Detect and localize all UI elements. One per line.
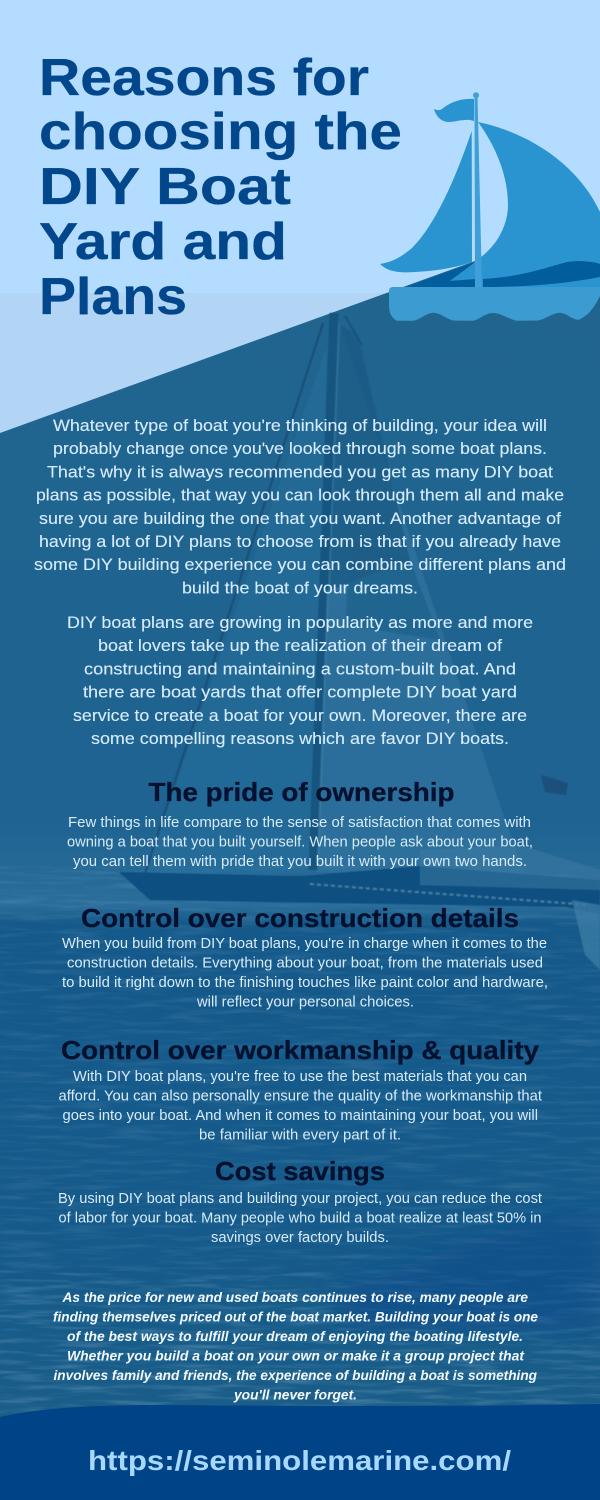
title: Plans <box>39 268 187 326</box>
intro paragraph: Whatever type of boat you're thinking of building, your idea will <box>53 417 547 435</box>
footer band <box>0 1404 600 1500</box>
body text: By using DIY boat plans and building your project, you can reduce the cost <box>58 1191 542 1207</box>
photo: sailboat <box>119 313 600 970</box>
intro paragraph <box>34 417 566 597</box>
closing paragraph: you'll never forget. <box>233 1386 357 1402</box>
intro paragraph: sure you are building the one that you want. Another advantage of <box>39 510 561 528</box>
title: DIY Boat <box>39 158 291 216</box>
intro paragraph: having a lot of DIY plans to choose from is that if you already have <box>39 533 561 551</box>
intro paragraph: plans as possible, that way you can look through them all and make <box>36 487 564 505</box>
intro paragraph: build the boat of your dreams. <box>182 579 418 597</box>
closing paragraph: involves family and friends, the experience of building a boat is something <box>54 1367 537 1383</box>
section: the pride of ownership <box>67 777 533 870</box>
body text: Few things in life compare to the sense of satisfaction that comes with <box>68 815 531 831</box>
heading: Control over workmanship & quality <box>61 1035 540 1065</box>
icon: mast ball <box>473 92 479 98</box>
heading: Cost savings <box>215 1156 385 1186</box>
section: control over workmanship and quality <box>58 1035 542 1144</box>
body text: goes into your boat. And when it comes to maintaining your boat, you will <box>62 1108 538 1124</box>
section: cost savings <box>58 1156 542 1246</box>
second paragraph <box>67 614 533 748</box>
intro paragraph: That's why it is always recommended you get as many DIY boat <box>47 463 553 481</box>
title: Reasons for <box>39 49 369 107</box>
body text: be familiar with every part of it. <box>199 1128 401 1144</box>
closing paragraph: finding themselves priced out of the boat market. Building your boat is one <box>53 1308 538 1324</box>
body text: afford. You can also personally ensure the quality of the workmanship that <box>58 1088 542 1104</box>
body text <box>62 936 548 1010</box>
closing paragraph: Whether you build a boat on your own or make it a group project that <box>67 1348 525 1364</box>
icon: sailboat <box>380 92 600 321</box>
closing paragraph: As the price for new and used boats continues to rise, many people are <box>62 1289 528 1305</box>
body text <box>58 1069 542 1144</box>
body text <box>67 815 533 870</box>
icon: left sail <box>380 131 472 272</box>
background: light sky <box>0 0 600 443</box>
closing paragraph <box>53 1289 538 1402</box>
body text: When you build from DIY boat plans, you're in charge when it comes to the <box>62 936 547 952</box>
intro paragraph: some DIY building experience you can combine different plans and <box>34 556 566 574</box>
heading: Control over construction details <box>81 903 519 933</box>
title: Yard and <box>39 213 287 271</box>
body text: you can tell them with pride that you built it with your own two hands. <box>73 854 527 870</box>
second paragraph: service to create a boat for your own. Moreover, there are <box>73 707 527 725</box>
photo: lighter water near the closing text <box>0 1270 600 1415</box>
title: choosing the <box>39 103 402 161</box>
second paragraph: DIY boat plans are growing in popularity as more and more <box>67 614 533 632</box>
intro paragraph: probably change once you've looked through some boat plans. <box>53 440 547 458</box>
icon: right sail <box>450 122 600 288</box>
icon: dark deck <box>405 261 600 288</box>
footer url: https://seminolemarine.com/ <box>88 1445 511 1476</box>
body text: construction details. Everything about your boat, from the materials used <box>67 956 543 972</box>
body text: to build it right down to the finishing touches like paint color and hardware, <box>62 975 548 991</box>
body text: savings over factory builds. <box>211 1230 389 1246</box>
icon: mast <box>474 96 482 288</box>
photo: deep water patch <box>340 1205 600 1330</box>
second paragraph: there are boat yards that offer complete DIY boat yard <box>83 684 517 702</box>
body text: With DIY boat plans, you're free to use the best materials that you can <box>73 1069 527 1085</box>
body text: will reflect your personal choices. <box>196 994 414 1010</box>
icon: hull <box>389 287 600 321</box>
second paragraph: constructing and maintaining a custom-built boat. And <box>84 660 516 678</box>
second paragraph: boat lovers take up the realization of their dream of <box>98 637 502 655</box>
second paragraph: some compelling reasons which are favor DIY boats. <box>91 730 509 748</box>
body text: of labor for your boat. Many people who build a boat realize at least 50% in <box>58 1210 542 1226</box>
body text: owning a boat that you built yourself. When people ask about your boat, <box>67 834 533 850</box>
body text <box>58 1191 542 1246</box>
title <box>39 49 402 326</box>
icon: flag <box>434 99 474 122</box>
section: control over construction details <box>62 903 548 1010</box>
photo: water ripples <box>0 866 600 1416</box>
closing paragraph: of the best ways to fulfill your dream of enjoying the boating lifestyle. <box>67 1328 523 1344</box>
heading: The pride of ownership <box>148 777 454 807</box>
